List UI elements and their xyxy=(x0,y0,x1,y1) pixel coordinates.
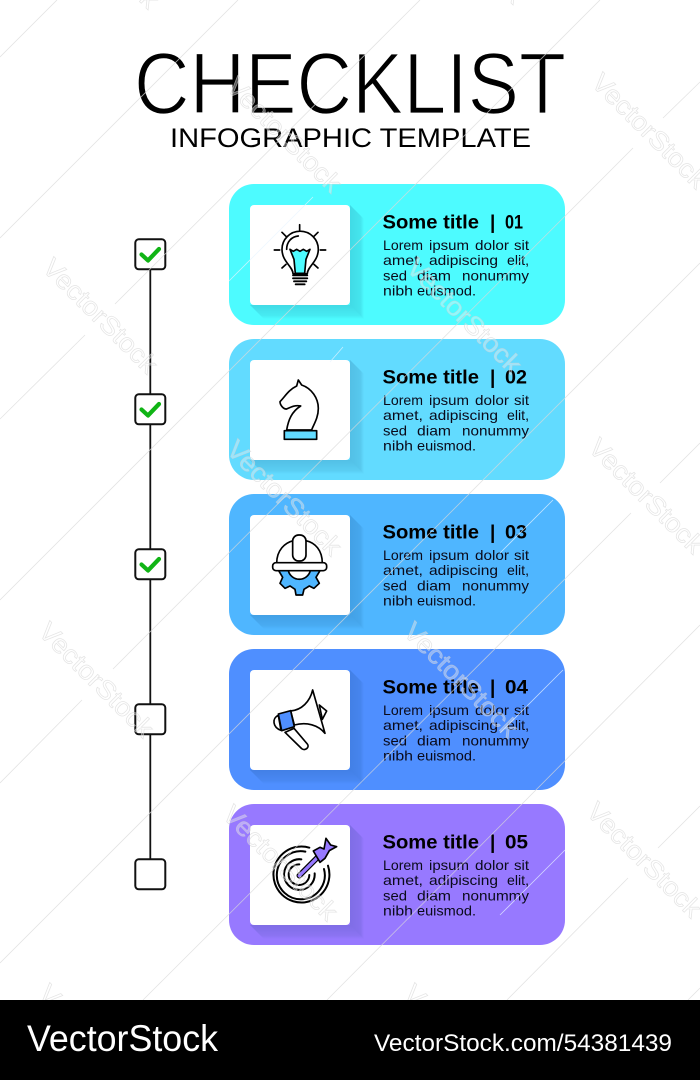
watermark VectorStock stamps: VectorStock xyxy=(221,434,349,562)
checkbox 2 checked xyxy=(135,394,165,424)
step 04 body text xyxy=(383,702,529,764)
step 02 body text: nibh xyxy=(383,438,413,454)
step 01 body text: adipiscing xyxy=(429,252,498,268)
panel: step 02 xyxy=(229,339,565,480)
step 01 body text: elit, xyxy=(507,252,529,268)
step 03 body text: nonummy xyxy=(462,578,529,594)
step 05 title: | xyxy=(490,832,495,854)
step 05 body text: dolor xyxy=(475,857,509,873)
step 01 title: | xyxy=(490,212,495,234)
watermark VectorStock stamps: VectorStock xyxy=(581,796,700,924)
step 04 body text: sed xyxy=(383,732,407,748)
step 01 body text: sed xyxy=(383,268,407,284)
checkbox 5 empty xyxy=(135,859,165,889)
title: CHECKLIST xyxy=(134,36,566,132)
step 03 body text: sed xyxy=(383,578,407,594)
panel: step 01 xyxy=(229,184,565,325)
step 01 body text: sit xyxy=(514,237,529,253)
step 01 title: Some title xyxy=(382,212,479,234)
icon: light bulb xyxy=(274,225,326,284)
step 04 body text: Lorem xyxy=(383,702,423,718)
step 02 body text: nonummy xyxy=(462,422,529,438)
step 03 title: | xyxy=(490,522,495,544)
panel: step 04 xyxy=(229,649,565,790)
step 04 body text: nonummy xyxy=(462,732,529,748)
step 05 body text: amet, xyxy=(383,872,423,888)
step 02 body text: sit xyxy=(514,392,529,408)
step 01 title: 01 xyxy=(505,212,523,234)
step 01 body text: diam xyxy=(417,268,451,284)
step 02 body text xyxy=(383,392,529,454)
watermark VectorStock stamps: VectorStock xyxy=(583,432,700,560)
step 03 body text: euismod. xyxy=(417,592,476,608)
step 04 body text: nibh xyxy=(383,748,413,764)
icon: target with arrow xyxy=(273,838,337,903)
step 04 body text: adipiscing xyxy=(429,717,498,733)
step 02 body text: ipsum xyxy=(429,392,469,408)
checkbox 3 checked xyxy=(135,549,165,579)
step 03 body text: amet, xyxy=(383,562,423,578)
step 02 title: 02 xyxy=(505,368,527,388)
step 02 body text: diam xyxy=(417,422,451,438)
step 04 title: | xyxy=(490,678,495,698)
step 05 title xyxy=(382,832,528,854)
watermark VectorStock stamps: VectorStock xyxy=(217,799,345,927)
step 01 title xyxy=(382,212,523,234)
step 05 title: Some title xyxy=(382,832,479,854)
step 05 body text: nonummy xyxy=(462,888,529,904)
step 05 body text: Lorem xyxy=(383,857,423,873)
step 04 title: 04 xyxy=(505,678,528,698)
timeline with checkboxes xyxy=(135,239,165,889)
watermark VectorStock stamps: VectorStock xyxy=(221,71,349,199)
icon: helmet and gear xyxy=(273,535,327,595)
watermark VectorStock stamps: VectorStock xyxy=(37,252,165,380)
step 05 body text: elit, xyxy=(507,872,529,888)
step 04 body text: amet, xyxy=(383,717,423,733)
subtitle: INFOGRAPHIC TEMPLATE xyxy=(170,123,531,153)
step 02 title: | xyxy=(490,368,495,388)
step 02 title xyxy=(382,368,527,388)
step 02 body text: euismod. xyxy=(417,438,476,454)
step 03 body text: nibh xyxy=(383,592,413,608)
step 03 body text: sit xyxy=(514,547,529,563)
checkbox 4 empty xyxy=(135,704,165,734)
step 04 body text: dolor xyxy=(475,702,509,718)
step 03 body text: Lorem xyxy=(383,547,423,563)
panel: step 03 xyxy=(229,494,565,635)
step 05 body text: diam xyxy=(417,888,451,904)
step 05 body text: euismod. xyxy=(417,902,476,918)
panel: step 05 xyxy=(229,804,565,945)
step 01 body text: Lorem xyxy=(383,237,423,253)
step 03 body text xyxy=(383,547,529,608)
step 05 body text: adipiscing xyxy=(429,872,498,888)
step 01 body text: amet, xyxy=(383,252,423,268)
step 04 body text: diam xyxy=(417,732,451,748)
icon: chess knight xyxy=(280,380,318,439)
step 01 body text: dolor xyxy=(475,237,509,253)
step 01 body text: euismod. xyxy=(417,282,476,298)
step 05 title: 05 xyxy=(505,832,528,854)
step 02 body text: dolor xyxy=(475,392,509,408)
step 03 title: 03 xyxy=(505,522,527,544)
footer bar xyxy=(0,1000,700,1080)
watermark VectorStock stamps: VectorStock xyxy=(33,616,161,744)
step 02 body text: Lorem xyxy=(383,392,423,408)
step 04 body text: euismod. xyxy=(417,748,476,764)
footer brand: VectorStock xyxy=(27,1018,218,1059)
watermark VectorStock stamps: VectorStock xyxy=(401,252,529,380)
step 03 body text: ipsum xyxy=(429,547,469,563)
step 04 body text: elit, xyxy=(507,717,529,733)
step 04 title xyxy=(382,678,528,698)
step 05 body text: nibh xyxy=(383,902,413,918)
step 04 title: Some title xyxy=(382,678,479,698)
step 03 body text: diam xyxy=(417,578,451,594)
step 03 title xyxy=(382,522,527,544)
step 03 body text: dolor xyxy=(475,547,509,563)
step 02 body text: adipiscing xyxy=(429,407,498,423)
icon: megaphone xyxy=(274,690,327,750)
step 03 body text: adipiscing xyxy=(429,562,498,578)
step 01 body text: nonummy xyxy=(462,268,529,284)
watermark VectorStock stamps: VectorStock xyxy=(398,616,526,744)
step 05 body text xyxy=(383,857,529,918)
step 05 body text: ipsum xyxy=(429,857,469,873)
step 02 body text: amet, xyxy=(383,407,423,423)
step 01 body text: nibh xyxy=(383,282,413,298)
step 04 body text: sit xyxy=(514,702,529,718)
step 03 title: Some title xyxy=(382,522,479,544)
step 05 body text: sit xyxy=(514,857,529,873)
step 02 body text: sed xyxy=(383,422,407,438)
step 02 body text: elit, xyxy=(507,407,529,423)
step 01 body text xyxy=(383,237,529,298)
checkbox 1 checked xyxy=(135,239,165,269)
step 05 body text: sed xyxy=(383,888,407,904)
footer image id: VectorStock.com/54381439 xyxy=(374,1030,672,1057)
step 03 body text: elit, xyxy=(507,562,529,578)
step 02 title: Some title xyxy=(382,368,479,388)
step 01 body text: ipsum xyxy=(429,237,469,253)
step 04 body text: ipsum xyxy=(429,702,469,718)
